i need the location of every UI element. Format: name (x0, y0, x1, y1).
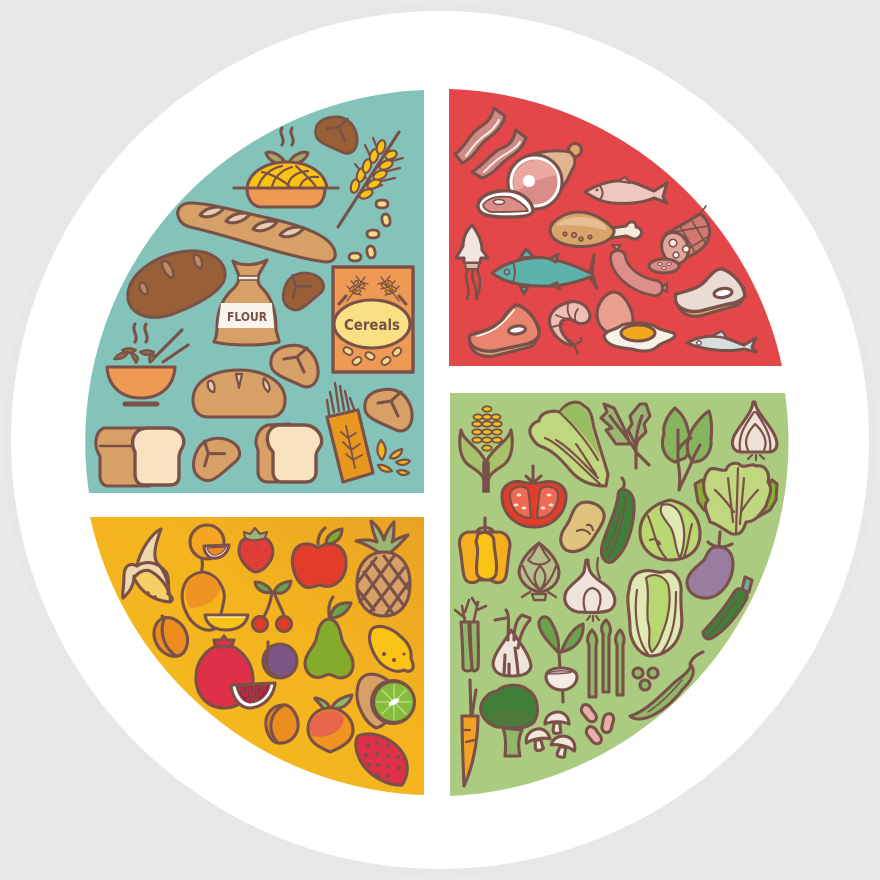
icon: steak right (675, 269, 745, 316)
icon: dragon fruit (356, 734, 407, 785)
icon: apricot left (154, 616, 188, 656)
icon: beans (578, 703, 616, 745)
icon: broccoli (481, 685, 537, 756)
icon: tan roll bottom (187, 430, 244, 489)
icon: apricot lower (266, 705, 298, 743)
text: flour: FLOUR (227, 310, 267, 324)
icon: mushrooms (524, 712, 577, 760)
icon: wheat stalk (338, 132, 403, 227)
icon: peach (308, 695, 353, 752)
icon: sausage (612, 245, 667, 292)
icon: tuna (492, 249, 597, 294)
icon: pasta bowl (234, 128, 338, 207)
icon: leaf lettuce (695, 463, 777, 534)
icon: strawberry (239, 528, 273, 572)
icon: turnip (539, 617, 583, 702)
icon: napa cabbage (628, 571, 682, 656)
icon: rice bowl (107, 324, 188, 404)
icon: kiwi (357, 674, 416, 728)
icon: orange (190, 525, 229, 559)
icon: small grains (377, 440, 410, 475)
icon: dark roll middle (278, 266, 327, 318)
icon: pineapple (356, 521, 410, 616)
icon: spaghetti pack (327, 383, 373, 482)
icon: eggplant (687, 532, 733, 598)
icon: bread slices left (96, 428, 184, 486)
icon: egg (597, 292, 633, 334)
icon: asparagus (588, 620, 624, 697)
icon: pomegranate (196, 636, 275, 708)
panel: fruits (90, 517, 424, 795)
icon: plum (263, 642, 297, 678)
icon: romaine lettuce (530, 402, 608, 486)
icon: lemon (369, 626, 413, 671)
icon: arugula (601, 404, 650, 468)
icon: pepper (459, 518, 510, 583)
icon: tan loaf (193, 370, 285, 417)
icon: shrimp (549, 302, 590, 354)
icon: baguette (178, 203, 335, 262)
icon: tan roll upper (271, 345, 318, 387)
icon: cherries (252, 581, 292, 632)
icon: celery (455, 598, 486, 671)
icon: squid (456, 225, 488, 299)
icon: salami (649, 206, 710, 273)
icon: corn (460, 406, 512, 492)
icon: garlic (565, 558, 615, 621)
panel: proteins (449, 89, 782, 366)
icon: bacon strips (455, 108, 526, 178)
icon: pea pod (630, 652, 703, 719)
icon: zucchini (703, 577, 752, 639)
icon: cucumber (601, 478, 634, 562)
icon: steak left (469, 305, 539, 356)
icon: chicken leg (550, 212, 642, 246)
icon: artichoke (519, 543, 559, 600)
icon: cabbage (640, 500, 700, 560)
panel: vegetables (450, 393, 788, 796)
icon: apple (292, 528, 346, 587)
text: cereals: Cereals (344, 316, 400, 334)
icon: scattered grains (349, 200, 391, 261)
icon: dark roll top (316, 117, 357, 153)
icon: tan roll lower right (365, 389, 412, 431)
icon: pear (305, 597, 353, 678)
icon: carrot (462, 680, 478, 786)
icon: spinach (662, 408, 712, 490)
icon: flour sack (214, 260, 279, 345)
icon: ham (478, 144, 582, 217)
icon: peas (633, 668, 658, 690)
icon: onion (732, 402, 777, 460)
icon: bread slices middle (256, 424, 322, 482)
icon: fried egg (604, 323, 675, 351)
icon: tomato (502, 466, 566, 527)
icon: pink fish (585, 177, 667, 203)
icon: cereal box (333, 267, 413, 372)
icon: banana (123, 529, 172, 602)
icon: mango (182, 560, 248, 630)
icon: fennel (493, 610, 531, 676)
icon: small fish (687, 331, 756, 352)
icon: potato (561, 502, 604, 552)
panel: grains (85, 90, 424, 493)
icon: dark loaf (128, 251, 225, 317)
